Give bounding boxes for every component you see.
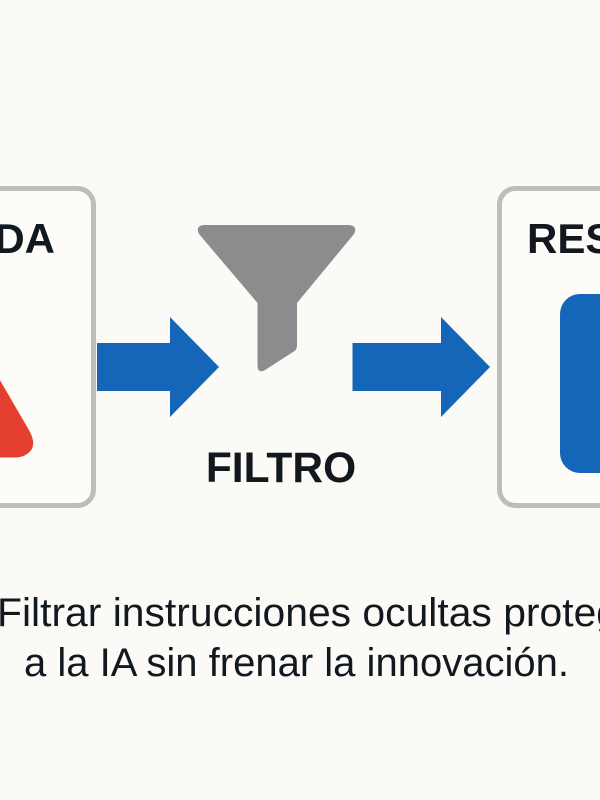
caption	[0, 591, 600, 685]
arrow: filtro to respuesta	[352, 317, 490, 417]
caption: Filtrar instrucciones ocultas proteg	[0, 591, 600, 635]
panel: entrada	[0, 188, 94, 506]
icon: funnel	[198, 225, 355, 371]
panel: respuesta	[500, 188, 600, 506]
label: filtro: FILTRO	[206, 445, 356, 492]
arrow: entrada to filtro	[97, 317, 219, 417]
caption: a la IA sin frenar la innovación.	[24, 641, 569, 685]
icon: blue shield block	[560, 294, 600, 473]
icon: red warning triangle	[0, 363, 33, 458]
